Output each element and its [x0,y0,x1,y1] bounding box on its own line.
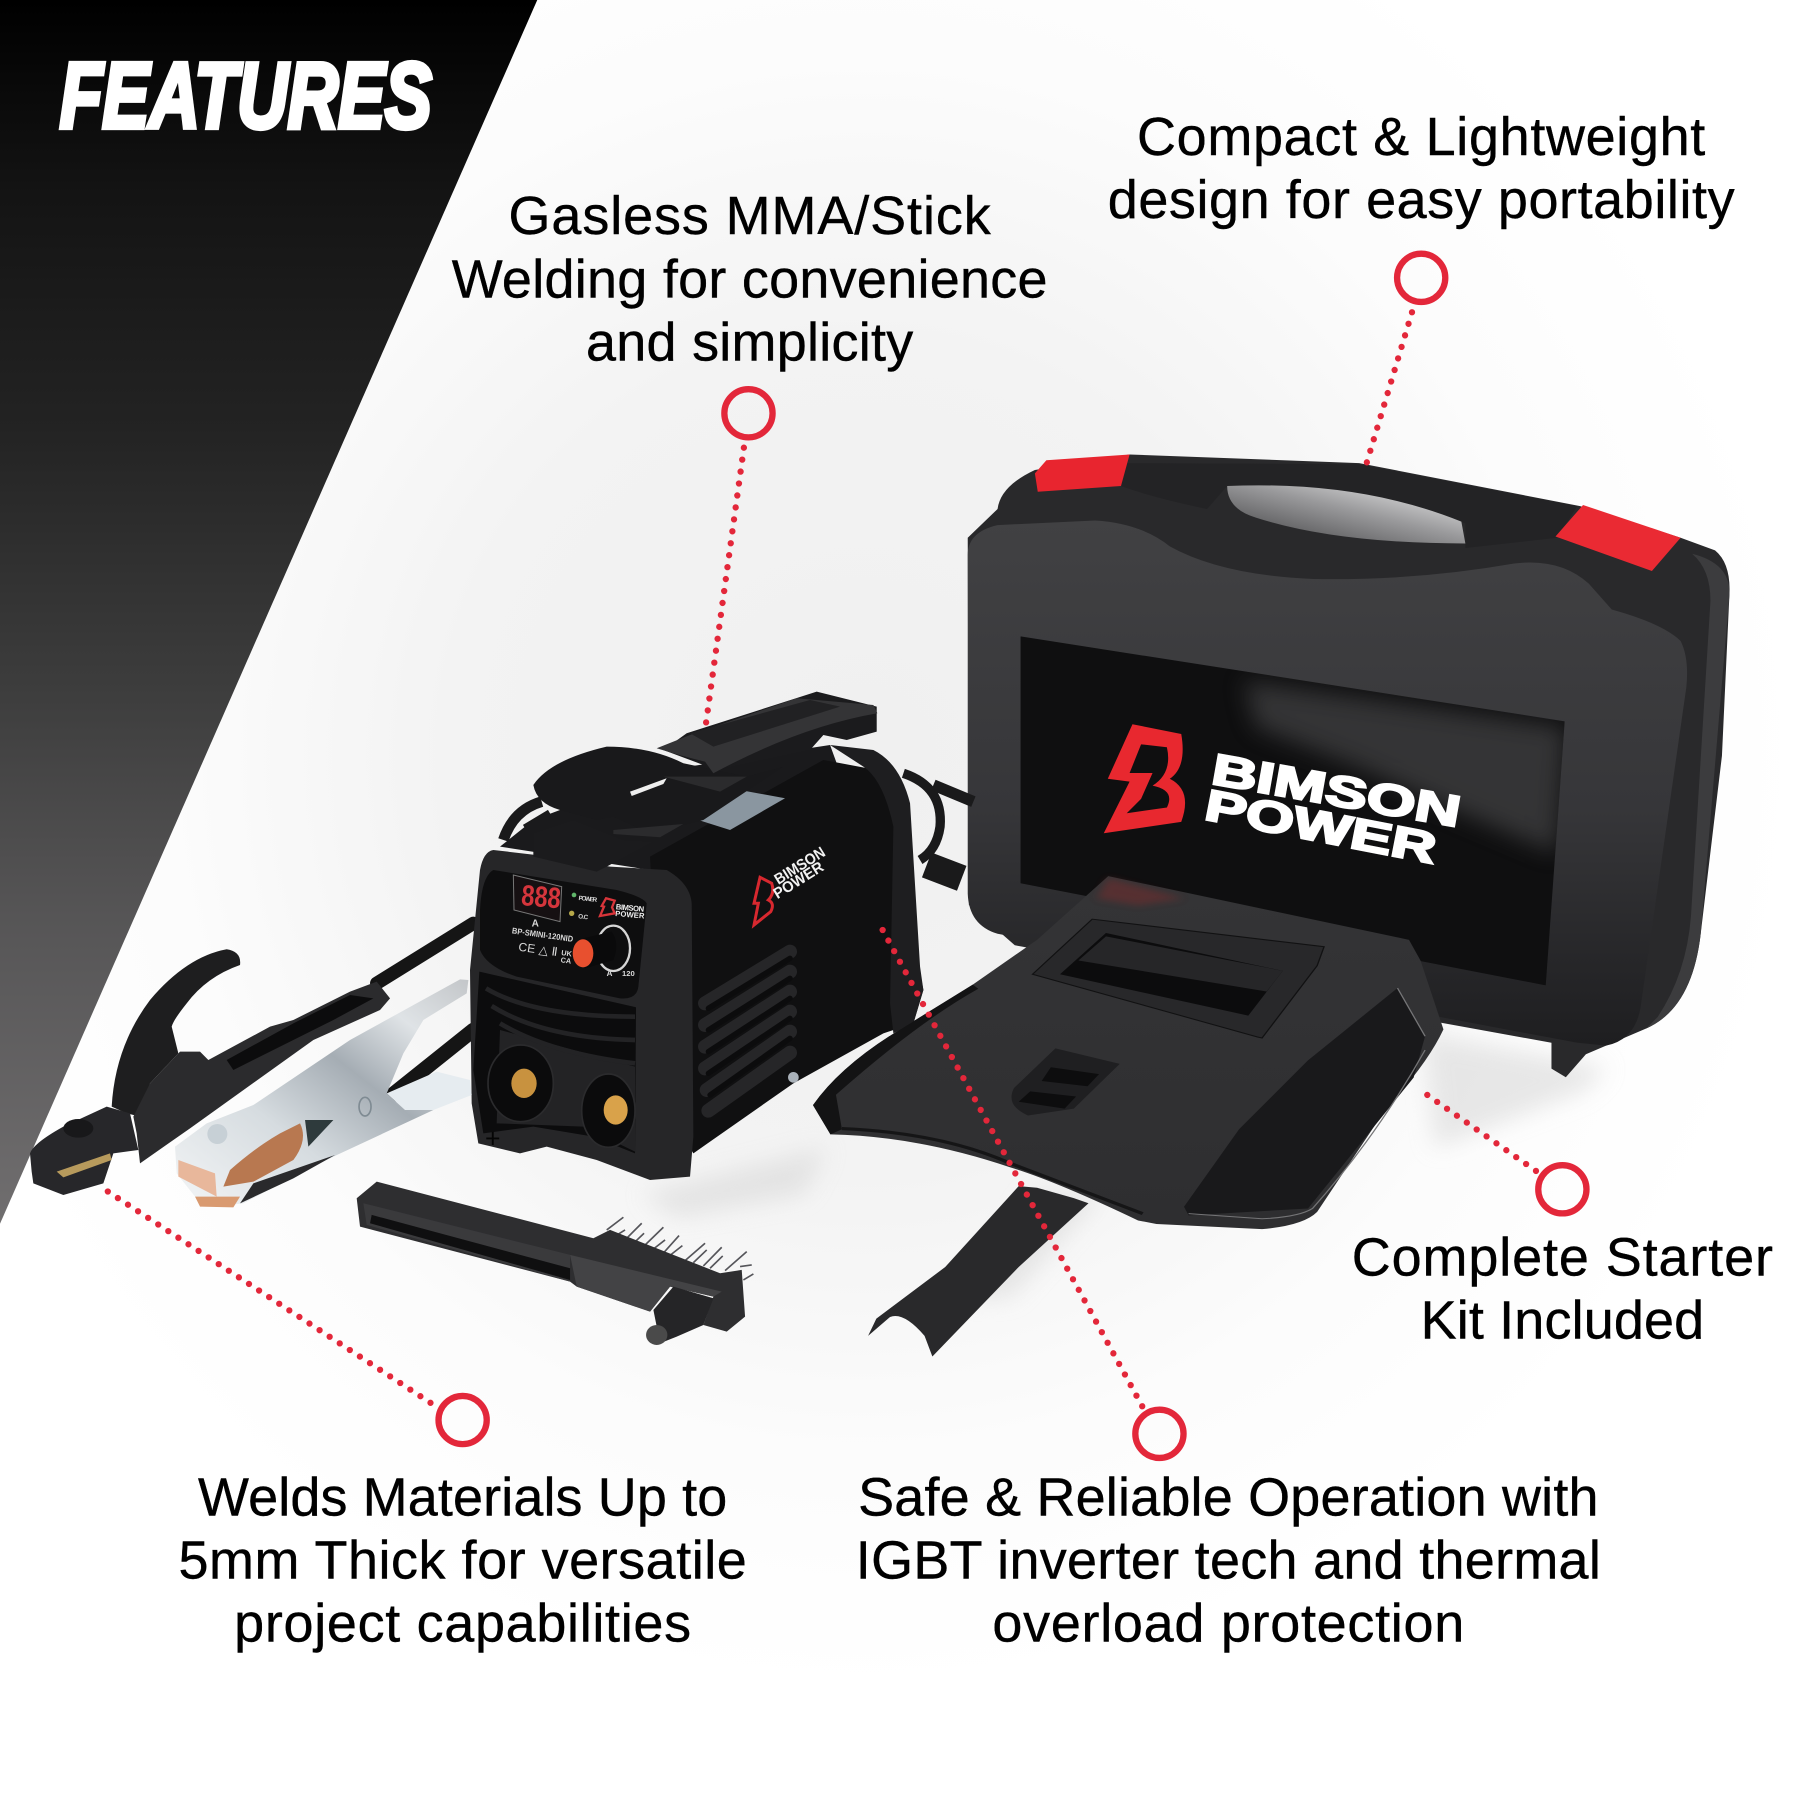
logo wordmark: BIMSON [1208,746,1464,837]
text block [179,1467,747,1654]
text block [452,186,1048,372]
panel labels: CE △ Ⅱ [518,940,558,959]
welder top face [500,745,837,870]
leader line [1418,1088,1536,1171]
text block: Gasless MMA/Stick [509,186,992,246]
text block [856,1467,1601,1654]
strap front tail [533,820,653,872]
front grille [473,972,636,1153]
text block: Welds Materials Up to [198,1467,727,1527]
panel labels: UK [561,948,573,959]
clamp body [175,979,468,1207]
electrode holder and earth clamp [30,949,472,1207]
holder jaw button [63,1119,93,1138]
panel labels: A [607,969,613,978]
control panel [480,870,647,999]
welder side [650,760,923,1153]
banner: dark diagonal [0,0,537,1224]
clamp copper jaw [178,1160,217,1197]
holder body [133,982,390,1163]
carry case [968,454,1730,1077]
brush bolt [653,1287,713,1343]
leader line [1366,312,1412,465]
text block [1108,107,1735,230]
front bezel [470,850,693,1180]
handle webbing [690,700,840,747]
marker [1135,1410,1184,1458]
callout: safe [856,922,1601,1654]
panel labels: BP-SMINI-120NID [511,925,574,944]
marker [439,1396,487,1444]
buckle bar [663,777,747,792]
clamp rivet [359,1097,371,1116]
panel labels: CA [560,955,573,966]
text block: Welding for convenience [452,249,1048,309]
leader line [706,448,744,723]
red clasp left [1035,454,1130,492]
digital display [513,875,562,922]
helmet clip [1011,1048,1120,1115]
helmet and handle [813,876,1443,1357]
text block: and simplicity [586,312,913,372]
strap gap [630,778,667,796]
helmet shell [813,876,1443,1229]
title: FEATURES [60,43,432,147]
logo mark [1104,724,1185,833]
helmet left flap [813,985,978,1134]
callout: welds [104,1189,747,1654]
helmet handle [868,1186,1088,1357]
helmet side face [1184,988,1425,1215]
holder jaw [30,1107,138,1195]
clamp lower shadow [240,1155,335,1203]
holder sleeve [227,995,373,1070]
plus mark: + [485,1123,501,1153]
clamp copper braid [223,1123,303,1187]
marker [1397,254,1445,302]
side vents [705,952,790,1111]
brush plate [570,1255,722,1312]
marker [724,389,773,437]
text block: IGBT inverter tech and thermal [856,1530,1601,1590]
helmet window frame [1032,919,1324,1038]
logo wordmark: POWER [1201,782,1440,873]
panel logo mark [600,898,615,916]
panel labels: POWER [615,909,645,921]
text block: Compact & Lightweight [1137,107,1705,167]
callout: compact [1108,107,1735,465]
wire brush [357,1182,753,1345]
panel labels: A [532,919,539,930]
side logo: BIMSON [771,844,829,888]
helmet reflection [1097,878,1184,905]
side logo: POWER [770,859,827,903]
case lid [968,520,1687,1046]
leader line [878,922,1142,1406]
case outer rim [1646,554,1729,1028]
logo wordmark [1201,746,1464,873]
clip buttons [1019,1067,1099,1109]
text block: Safe & Reliable Operation with [858,1467,1599,1527]
right bumper [830,745,923,1033]
holder arm [112,949,240,1117]
case handle [1121,463,1577,548]
callout: starter kit [1352,1088,1773,1351]
marker [1538,1165,1586,1213]
side logo [754,844,829,925]
text block: overload protection [992,1594,1464,1654]
power cord behind welder [503,773,973,878]
clamp tail [387,1072,472,1110]
strap folded loop [533,747,783,837]
electrode cables [377,923,473,1097]
red clasp right [1555,505,1681,571]
handle bar [657,698,877,773]
text block: design for easy portability [1108,170,1735,230]
text block: Complete Starter [1352,1227,1773,1287]
clamp bolt [207,1124,227,1144]
holder jaw teeth [57,1153,112,1177]
text block: Kit Included [1421,1291,1704,1351]
panel labels: POWER [578,895,598,904]
panel labels: 120 [622,969,635,978]
digital display: 888 [520,879,562,915]
control knob [573,926,630,971]
bristles [607,1217,753,1280]
text block [1352,1227,1773,1351]
helmet side edge [1189,988,1425,1219]
clamp dark gap [305,1120,333,1147]
soft floor shadows [643,1033,1607,1297]
negative socket [582,1074,635,1147]
brush frame opening [363,1203,570,1282]
helmet front lip [842,1129,1143,1214]
callout: gasless [452,186,1048,723]
text block: 5mm Thick for versatile [179,1530,747,1590]
side screw [788,1072,799,1083]
rating plate [698,791,785,830]
brush body [357,1182,745,1332]
helmet glass [1060,933,1283,1016]
positive socket [488,1045,553,1122]
case window [1015,630,1572,991]
welder [470,692,923,1180]
leader line [104,1189,430,1403]
case rear shell [968,454,1730,1077]
welding strap [533,692,877,872]
panel labels [511,893,645,978]
panel labels: BIMSON [616,902,645,914]
text block: project capabilities [234,1594,691,1654]
strap upper run [663,692,877,770]
case logo [1104,724,1464,873]
panel labels: O.C [578,913,589,921]
